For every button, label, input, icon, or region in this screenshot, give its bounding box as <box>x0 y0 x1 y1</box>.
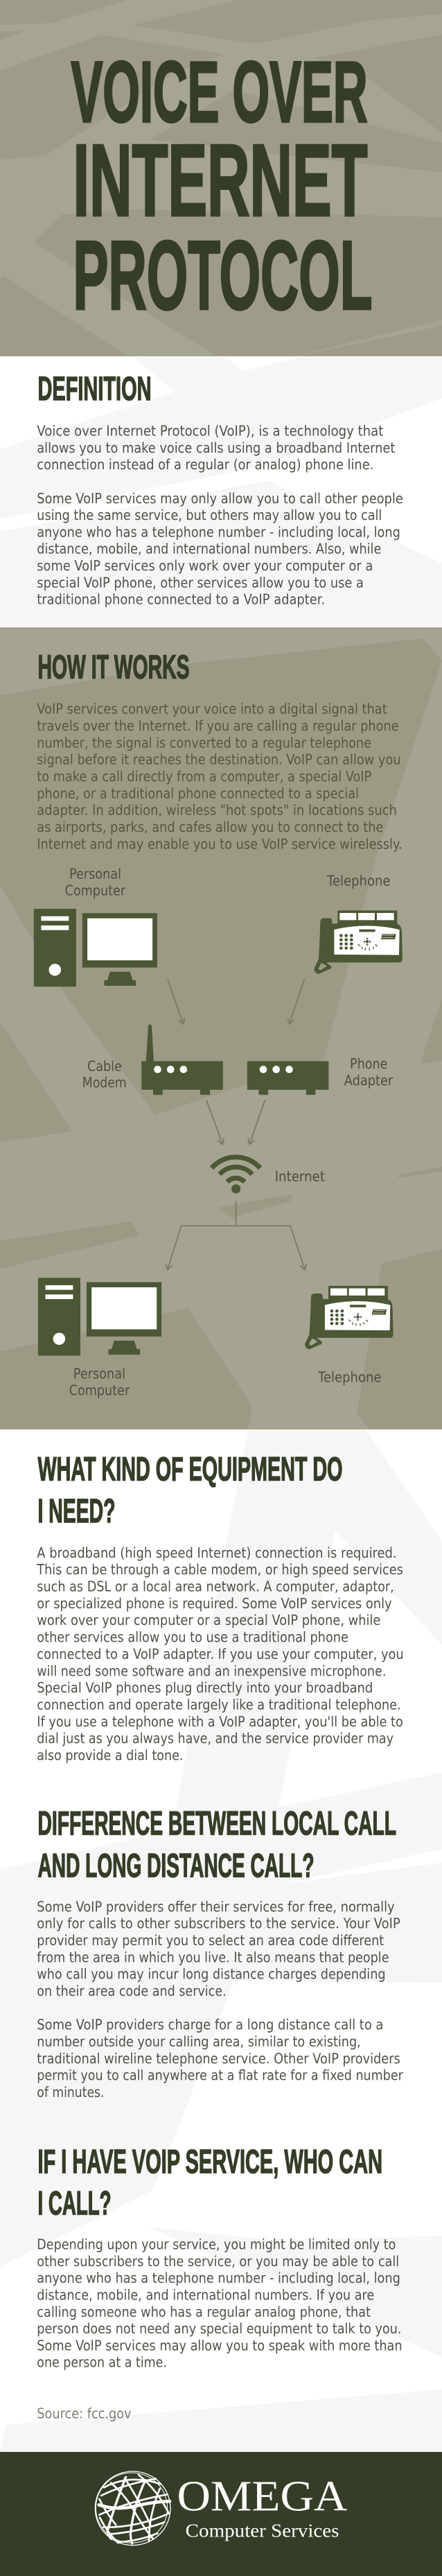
text block: how it works: adapter. In addition, wireless "hot spots" in locations such <box>37 802 397 819</box>
icon: wifi <box>212 1157 260 1194</box>
text block: definition paragraphs <box>37 423 403 608</box>
label: cable modem <box>82 1058 127 1091</box>
text block: definition paragraphs: allows you to make voice calls using a broadband Internet <box>37 440 395 456</box>
text block: definition paragraphs: Voice over Internet Protocol (VoIP), is a technology that <box>37 423 383 440</box>
text block: equipment: will need some software and an inexpensive microphone. <box>37 1662 386 1679</box>
text block: definition paragraphs: connection instead of a regular (or analog) phone line. <box>37 456 373 473</box>
text block: definition paragraphs: using the same service, but others may allow you to call <box>37 507 382 523</box>
heading: definition: DEFINITION <box>37 371 151 408</box>
heading: equipment: I NEED? <box>37 1493 115 1530</box>
panel: definition <box>0 356 442 627</box>
text block: difference: provider may permit you to select an area code different <box>37 1932 384 1949</box>
label: personal computer top: Computer <box>65 882 126 898</box>
text block: equipment: other services allow you to use a traditional phone <box>37 1629 348 1646</box>
label: cable modem: Cable <box>87 1058 122 1074</box>
title <box>71 44 373 330</box>
label: personal computer top: Personal <box>69 865 121 882</box>
text block: equipment: Special VoIP phones plug directly into your broadband <box>37 1680 373 1696</box>
arrow: modem to internet <box>206 1100 222 1145</box>
logo wordmark: OMEGA <box>177 2473 348 2520</box>
text block: how it works: as airports, parks, and cafes allow you to connect to the <box>37 819 383 835</box>
heading: how it works: HOW IT WORKS <box>37 649 190 686</box>
heading: equipment <box>37 1452 342 1530</box>
text block: difference: only for calls to other subscribers to the service. Your VoIP <box>37 1915 400 1932</box>
text block: who can I call: distance, mobile, and international numbers. If you are <box>37 2286 374 2303</box>
text block: equipment: work over your computer or a special VoIP phone, while <box>37 1612 380 1628</box>
text block: definition paragraphs: special VoIP phone, other services allow you to use a <box>37 574 364 591</box>
text block: how it works: VoIP services convert your voice into a digital signal that <box>37 701 387 717</box>
logo tagline: Computer Services <box>186 2521 339 2541</box>
text block: equipment: also provide a dial tone. <box>37 1747 183 1764</box>
label: personal computer top <box>65 865 126 898</box>
text block: who can I call: one person at a time. <box>37 2354 167 2371</box>
text block: difference <box>37 1898 403 2100</box>
heading: difference <box>37 1805 396 1884</box>
icon: telephone top <box>314 910 403 974</box>
icon: cable modem <box>141 1025 223 1095</box>
text block: difference: on their area code and service. <box>37 1983 227 1999</box>
text block: who can I call: calling someone who has a regular analog phone, that <box>37 2304 371 2320</box>
text block: equipment: such as DSL or a local area network. A computer, adaptor, <box>37 1578 394 1594</box>
label: phone adapter <box>344 1056 394 1089</box>
heading: who can I call <box>37 2143 382 2222</box>
label: internet: Internet <box>275 1168 325 1185</box>
text block: equipment: or specialized phone is required. Some VoIP services only <box>37 1595 392 1612</box>
text block: definition paragraphs: some VoIP services only work over your computer or a <box>37 557 373 574</box>
text block: how it works: number, the signal is converted to a regular telephone <box>37 734 371 751</box>
text block: how it works: phone, or a traditional phone connected to a special <box>37 785 359 801</box>
arrow: adapter to internet <box>249 1100 265 1145</box>
text block: difference: who call you may incur long distance charges depending <box>37 1966 386 1983</box>
label: telephone bottom: Telephone <box>317 1368 381 1385</box>
icon: personal computer top <box>34 909 157 986</box>
label: telephone top: Telephone <box>326 872 391 889</box>
icon: personal computer bottom <box>38 1278 161 1356</box>
text block: who can I call <box>37 2236 403 2371</box>
text block: definition paragraphs: traditional phone connected to a VoIP adapter. <box>37 591 325 608</box>
label: phone adapter: Phone <box>350 1056 388 1072</box>
arrow: computer to modem <box>168 980 183 1024</box>
text block: difference: of minutes. <box>37 2084 104 2100</box>
label: cable modem: Modem <box>82 1074 127 1091</box>
panel: how it works <box>0 627 442 1429</box>
arrow: telephone to adapter <box>290 980 304 1024</box>
text block: equipment <box>36 1544 404 1764</box>
panel: lower white content <box>0 1429 442 2453</box>
label: personal computer bottom: Computer <box>69 1382 130 1399</box>
text block: definition paragraphs: distance, mobile, and international numbers. Also, while <box>37 541 381 557</box>
icon: omega globe logo <box>95 2471 170 2545</box>
text block: how it works: to make a call directly from a computer, a special VoIP <box>37 768 371 785</box>
text block: how it works <box>37 701 403 852</box>
icon: telephone bottom <box>305 1286 394 1349</box>
label: personal computer bottom <box>69 1365 130 1399</box>
text block: difference: Some VoIP providers offer their services for free, normally <box>37 1898 395 1915</box>
text block: equipment: A broadband (high speed Internet) connection is required. <box>37 1544 397 1561</box>
panel: footer <box>0 2452 442 2576</box>
source note: Source: fcc.gov <box>37 2405 132 2421</box>
label: personal computer bottom: Personal <box>73 1365 125 1382</box>
panel: title hero <box>0 0 442 356</box>
text block: difference: number outside your calling area, similar to existing, <box>37 2033 361 2050</box>
heading: who can I call: I CALL? <box>37 2185 111 2222</box>
label: phone adapter: Adapter <box>344 1072 394 1089</box>
text block: difference: from the area in which you live. It also means that people <box>37 1949 389 1965</box>
arrow: internet branching to outputs <box>168 1201 305 1270</box>
text block: difference: Some VoIP providers charge for a long distance call to a <box>37 2017 383 2033</box>
icon: phone adapter <box>247 1061 328 1095</box>
